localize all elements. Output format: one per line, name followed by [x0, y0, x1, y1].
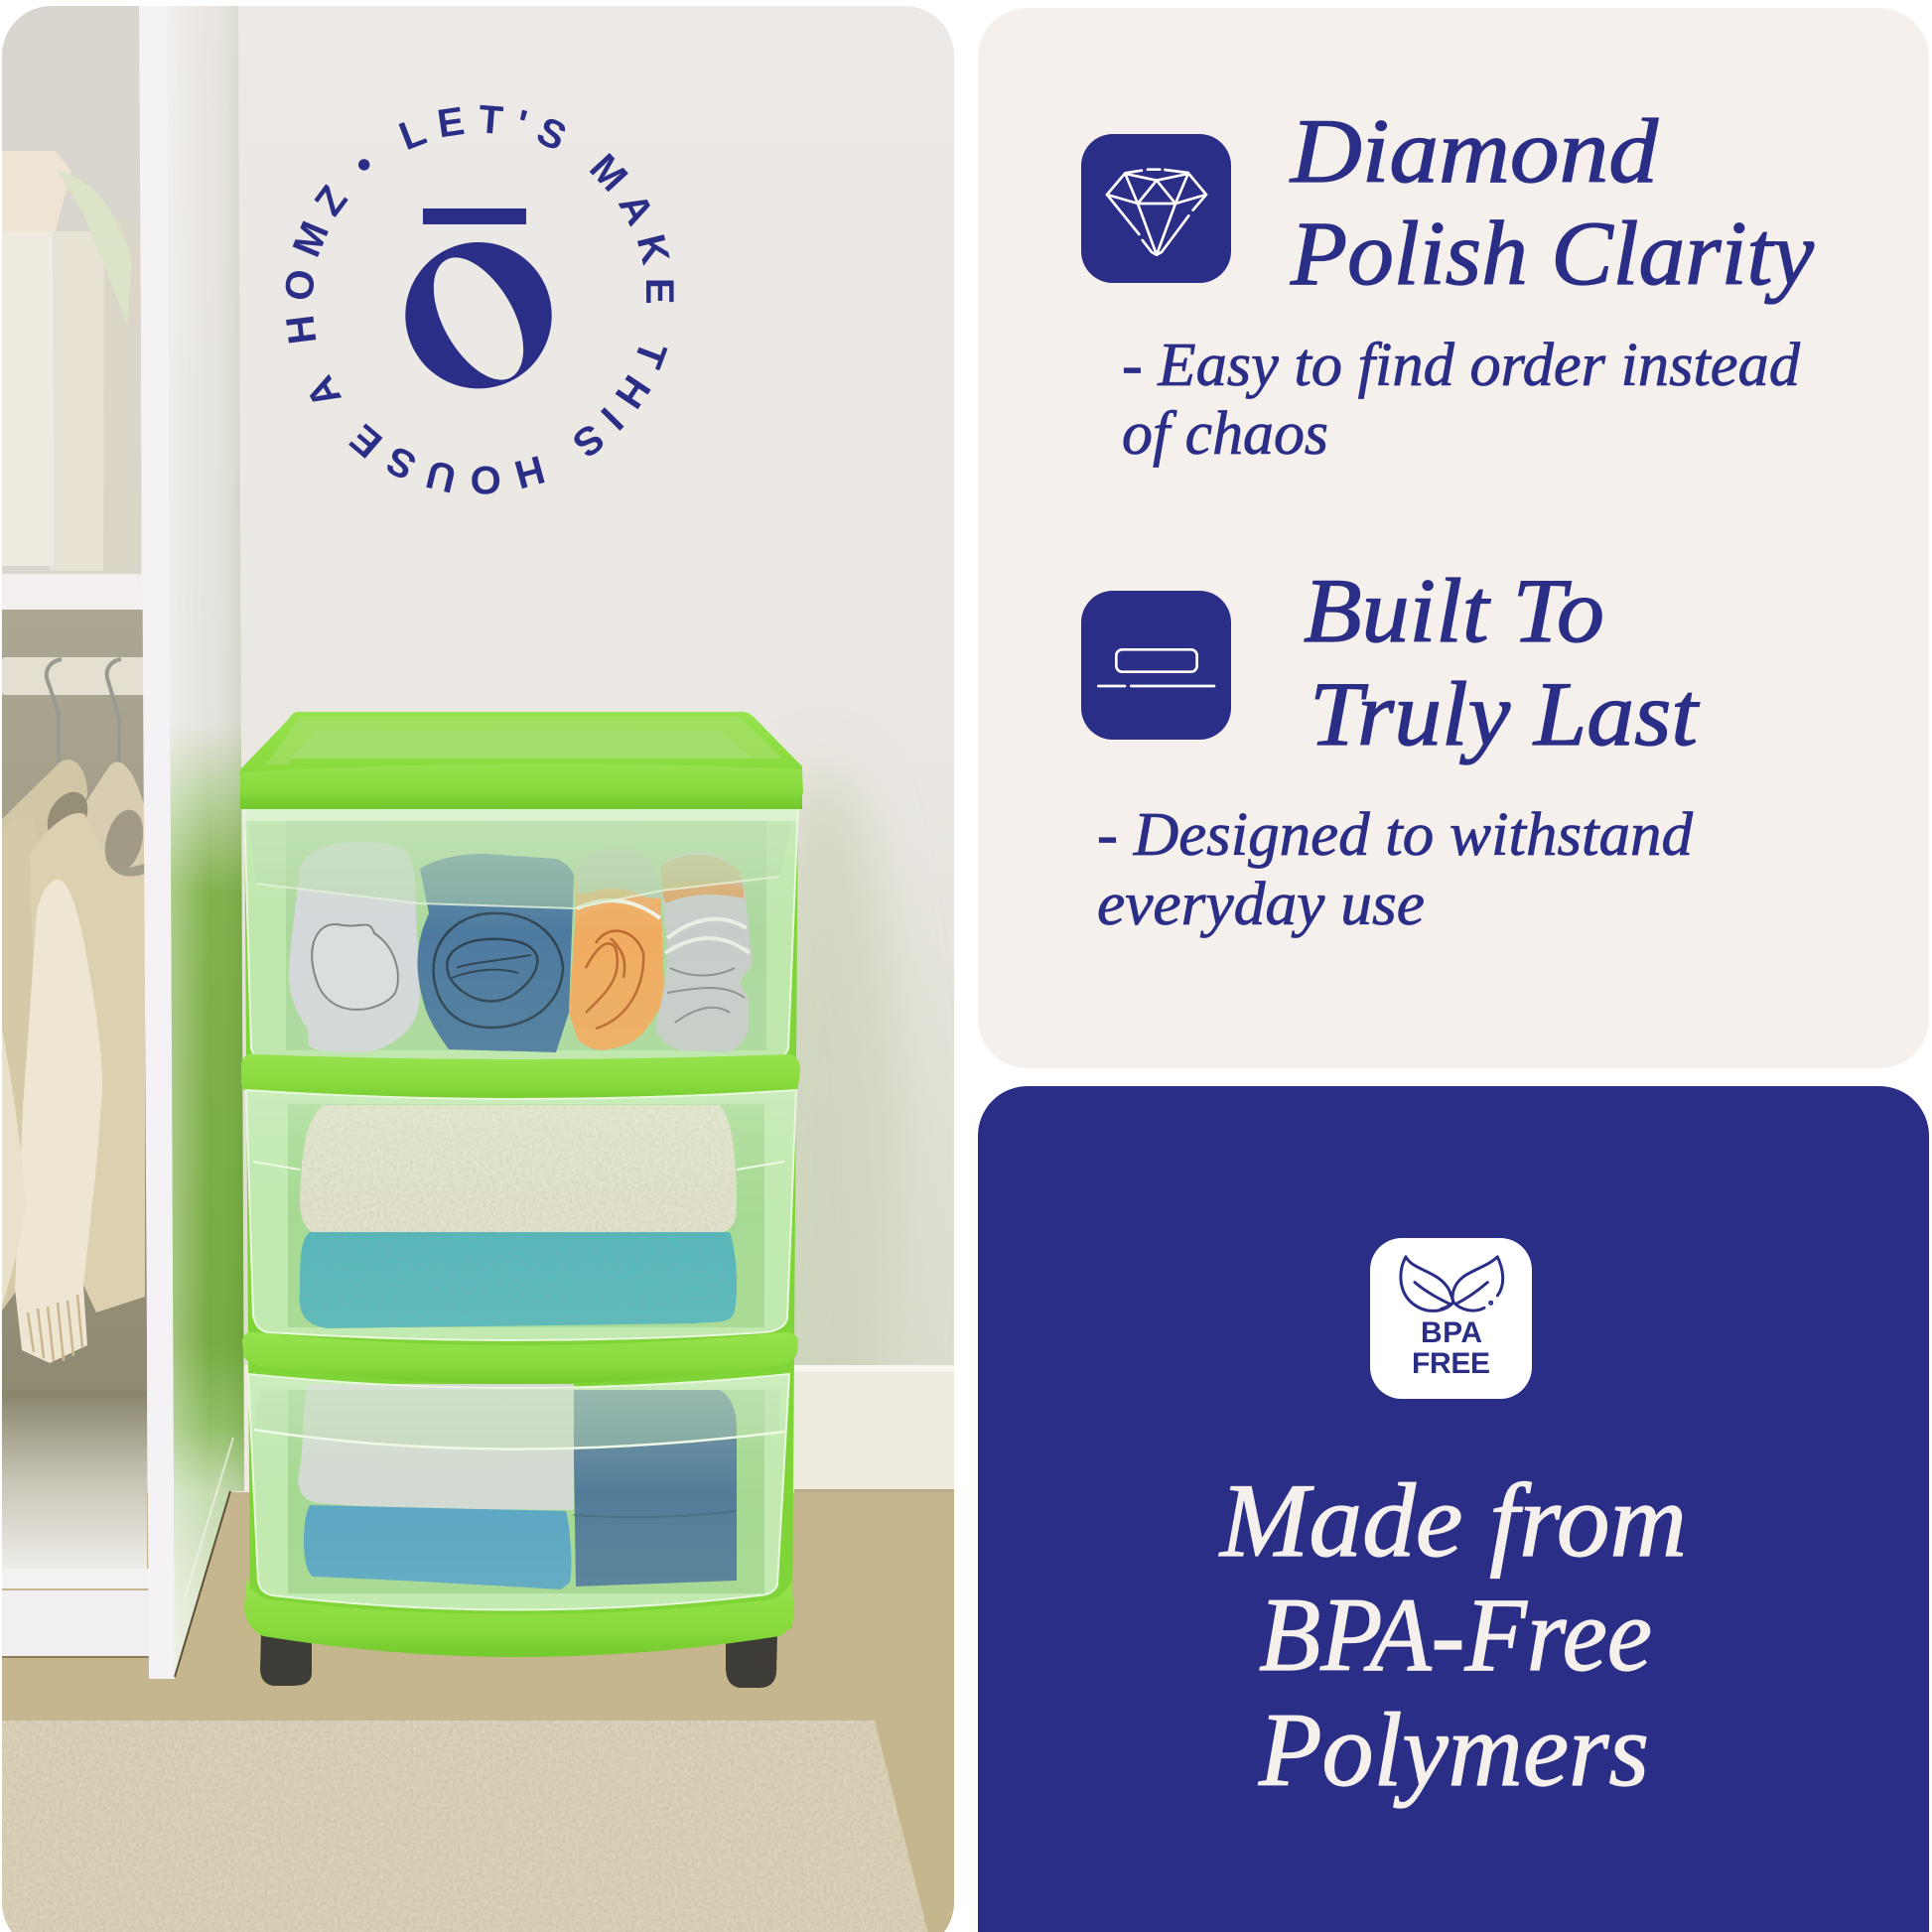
storage basket [2, 151, 141, 571]
text: designed to withstand: - Designed to withstand [1097, 801, 1694, 869]
drawer 3 dim upper front [254, 1390, 779, 1449]
cream towel [300, 1105, 737, 1234]
logo badge [286, 105, 674, 494]
green glow on wall [794, 764, 903, 1365]
green band 2 [242, 1332, 798, 1384]
drawer 1 film and rim [244, 804, 798, 1062]
closet base shelf [2, 1569, 149, 1658]
navy stack [573, 1390, 737, 1587]
heading: made from BPA-free polymers: Polymers [1258, 1692, 1649, 1808]
cart lid [240, 712, 803, 809]
rolled navy towel [418, 854, 574, 1052]
drawer 2 interior [246, 1090, 796, 1340]
text: designed to withstand [1097, 801, 1694, 938]
heading: Diamond Polish Clarity: Diamond [1289, 100, 1659, 202]
baseboard [233, 1365, 955, 1494]
icon: slab [1081, 591, 1231, 740]
drawer cart [240, 712, 803, 1688]
post side panel [167, 6, 244, 1677]
text: easy to find order: - Easy to find order instead [1122, 332, 1801, 399]
drawer 1 interior [244, 804, 798, 1062]
teal towel [300, 1232, 737, 1328]
text: easy to find order [1122, 332, 1801, 468]
green band 1 [241, 1054, 800, 1091]
panel: features [978, 8, 1929, 1068]
text: designed to withstand: everyday use [1097, 871, 1425, 938]
front sweater sleeve [15, 880, 102, 1363]
rolled orange towel [569, 872, 664, 1050]
logo ring [405, 242, 552, 388]
heading: Diamond Polish Clarity: Polish Clarity [1290, 203, 1814, 304]
rolled gray socks [655, 851, 753, 1052]
wheels [260, 1633, 777, 1688]
panel: room photo with drawer cart [2, 0, 955, 1932]
logo bar [423, 208, 526, 224]
heading: Built To Truly Last [1304, 560, 1701, 764]
left sleeve front [2, 1031, 21, 1305]
wall [141, 6, 954, 1492]
heading: made from BPA-free polymers: BPA-Free [1259, 1577, 1652, 1693]
drawer 3 [248, 1374, 789, 1610]
front sweater body [30, 813, 145, 1312]
rear sweater [2, 864, 34, 1311]
bottom green band [244, 1579, 794, 1657]
wood floor [2, 1492, 955, 1932]
drawer 3 interior [248, 1374, 789, 1610]
closet upper bay [2, 6, 141, 574]
hanging rail [2, 657, 147, 695]
cart green back frame [244, 784, 798, 1645]
circular slogan: • LET'S MAKE THIS HOUSE A HOMZ [286, 105, 674, 494]
drawer 1 [244, 804, 798, 1062]
rug [2, 1721, 931, 1932]
blue towel [304, 1505, 571, 1589]
icon: BPA free leaves: BPA [1421, 1316, 1482, 1349]
hangers [2, 659, 149, 876]
text: easy to find order: of chaos [1122, 400, 1328, 468]
heading: Built To Truly Last: Truly Last [1310, 663, 1701, 764]
icon: BPA free leaves: FREE [1412, 1347, 1490, 1380]
closet lower bay [2, 608, 147, 1392]
rolled gray towel [289, 842, 420, 1052]
icon: BPA free leaves [1370, 1238, 1532, 1399]
light gray towel [298, 1384, 574, 1510]
white post front [139, 6, 175, 1679]
ribbed cuff [28, 1295, 82, 1361]
panel: BPA free [978, 1086, 1929, 1932]
shelf [2, 574, 147, 610]
icon: diamond [1081, 134, 1231, 283]
heading: made from BPA-free polymers [1218, 1462, 1687, 1808]
sweaters [2, 813, 145, 1363]
drawer 1 dim upper front [298, 842, 743, 908]
heading: Built To Truly Last: Built To [1304, 560, 1604, 661]
drawer 3 film and rim [248, 1374, 789, 1610]
heading: made from BPA-free polymers: Made from [1218, 1462, 1687, 1579]
heading: Diamond Polish Clarity [1289, 100, 1814, 304]
drawer 2 [246, 1090, 796, 1340]
drawer 2 film and rim [246, 1090, 796, 1340]
